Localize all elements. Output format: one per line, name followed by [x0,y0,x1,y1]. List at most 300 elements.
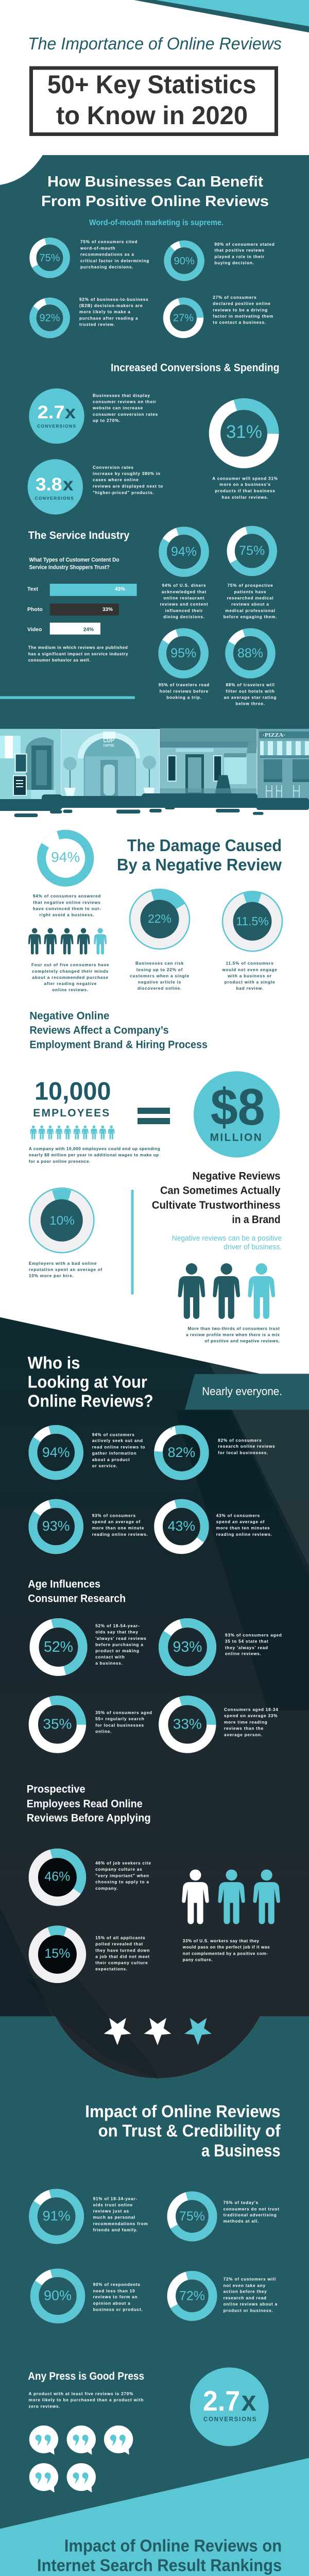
text: five reviews: more likely to be purchased than a product with [29,2398,144,2402]
stat: 92 percent: more likely to make a [79,310,131,314]
heading: the service industry: The Service Industry [28,530,130,541]
stat: 82 percent local: 82% of consumers [218,1438,262,1443]
bar chart: customer content trust: 24% [83,627,94,633]
stat: 22 percent [129,889,190,991]
heading: any press: Any Press is Good Press [28,2370,144,2382]
stat: 11.5 percent: 11.5% [236,914,269,928]
heading: search result rankings: Internet Search Result Rankings [37,2555,282,2574]
icon: three stars [104,2018,212,2045]
shop: cup coffee: CUP [103,737,114,744]
text: 380 percent: Conversion rates [93,465,134,470]
panel: impact on search rankings [0,2458,309,2576]
stat: 11.5 percent: product with a single [225,980,275,985]
stat: 94 percent avoid [33,828,101,917]
heading: trustworthiness: Can Sometimes Actually [160,1184,281,1197]
stat: 10,000 employees: A company with 10,000 employees could end up spending [29,1147,160,1151]
stat: 11.5 percent: bad review. [236,986,264,991]
stat: 10 percent: reputation spent an average of [29,1267,102,1272]
icon: equals sign [138,1108,170,1124]
stat: 52 percent: product or making [95,1649,140,1653]
panel: who is looking at your online reviews [0,1317,309,2078]
stat: 75 percent advertising: methods at all. [224,2219,259,2224]
heading: who is looking [28,1353,153,1411]
stat: 94 percent diners: influenced their [165,608,203,613]
stat: 46 percent culture: company. [95,1886,118,1891]
banner: nearly everyone [185,1374,309,1410]
stat: 91 percent: friends and family. [93,2228,138,2232]
stat: 94 percent customers: or service. [92,1464,117,1468]
stat: 11.5 percent: would not even engage [221,968,278,972]
text: 270 percent: up to 270%. [93,418,121,423]
stat: 88 percent travelers: filter out hotels with [226,689,275,693]
stat: 10 percent: 10% [49,1214,75,1228]
heading: trustworthiness [152,1170,281,1226]
street and dashes [0,793,309,817]
badge: 3.8x conversions: 3.8 [36,474,62,495]
stat: 90 percent: that positive reviews [214,248,265,253]
stat: 33 percent: Consumers aged 18-34 [224,1707,279,1712]
illustration: storefront street [0,728,309,817]
stat: 92 percent: purchase after reading a [79,316,138,320]
stat: 43 percent ten minutes: spend an average of [216,1519,265,1524]
badge: 8 million dollars: $8 [211,1078,265,1136]
stat: 93 percent one minute: 93% [42,1518,70,1534]
stat: 72 percent customers: online reviews about a [224,2302,278,2307]
stat: 82 percent local: for local businesses. [218,1451,268,1455]
bar chart: customer content trust: Photo [27,606,43,613]
stat: 33 percent: 33% [173,1716,202,1732]
stat: 94 percent customers: read online reviews to [92,1445,145,1450]
heading: employment brand: Employment Brand & Hiring Process [29,1039,208,1051]
stat: 82 percent local [153,1425,276,1481]
badge: 3.8x conversions: CONVERSIONS [35,496,74,501]
stat: 94 percent avoid: right avoid a business. [39,912,95,917]
stat: 90 percent respondents: opinion about a [93,2301,131,2306]
heading: who is looking: Who is [28,1353,80,1372]
stat: 88 percent travelers: below three. [235,702,265,706]
stat: 94 percent diners: 94% of U.S. diners [162,583,206,588]
stat: 27 percent: reviews to be a driving [213,308,268,312]
heading: age influences: Consumer Research [28,1592,126,1604]
stat: 72 percent customers [167,2270,278,2321]
stat: 91 percent: 91% [43,2208,71,2224]
stat: 91 percent: recommendations from [93,2222,148,2226]
stat: 10,000 employees: 10,000 [35,1077,111,1105]
stat: 75 percent: recommendations as a [80,252,134,257]
text: five reviews: A product with at least five reviews is 270% [29,2392,133,2396]
stat: 94 percent customers: gather information [92,1451,136,1456]
stat: 46 percent culture: choosing to apply to a [95,1880,149,1885]
header corner ribbon [134,0,309,32]
stat: 43 percent ten minutes [153,1498,272,1555]
stat: 75 percent advertising: traditional advertising [224,2213,277,2217]
badge: 3.8x conversions [28,459,83,515]
icon: three people [178,1263,275,1319]
shop: awning and door [0,729,61,800]
stat: 92 percent: 92% of business-to-business [79,297,148,302]
stat: 92 percent [29,297,148,338]
stat: 52 percent: olds say that they [95,1630,139,1635]
stat: 90 percent respondents: business or product. [93,2308,143,2312]
text: medium matters: consumer behavior as well. [28,658,91,663]
stat: 94 percent customers: actively seek out and [92,1438,143,1443]
stat: 52 percent: contact with [95,1655,125,1659]
heading: age influences [28,1578,126,1604]
stat: 35 percent: 35% of consumers aged [95,1710,152,1715]
stat: 95 percent travelers: 95% of travelers read [159,683,210,687]
stat: 95 percent travelers [157,626,210,700]
stat: 95 percent travelers: booking a trip. [166,696,202,700]
heading: how businesses can benefit: How Businesses Can Benefit [47,174,263,190]
stat: 92 percent: trusted review. [79,322,115,327]
heading: search result rankings [37,2536,282,2574]
badge: 2.7x conversions: x [65,402,76,422]
icon: three workers [182,1870,280,1924]
stat: 88 percent travelers: an average star rating [224,696,277,700]
stat: 46 percent culture: 46% [44,1869,70,1884]
bar chart: customer content trust: Text [27,586,38,592]
stat: 94 percent avoid: that negative online reviews [33,900,101,905]
shop: dark door [160,728,257,795]
stat: 27 percent: to contact a business. [213,320,266,325]
stat: 27 percent: 27% of consumers [213,295,256,300]
stat: 43 percent ten minutes: 43% of consumers [216,1514,260,1518]
stat: 94 percent customers: about a product [92,1458,130,1462]
stat: 93 percent one minute [27,1498,148,1555]
main title box: to Know in 2020 [56,101,248,130]
bar chart: customer content trust [27,557,137,635]
heading: damage: By a Negative Review [117,855,282,874]
stat: 31 percent: A consumer will spend 31% [212,476,278,481]
stat: 43 percent ten minutes: reading online reviews. [216,1532,272,1537]
stat: 94 percent avoid: have convinced them to out- [33,907,101,911]
stat: 15 percent turned down: 15% [44,1946,70,1961]
heading: impact on trust [85,2102,281,2160]
stat: 75 percent advertising: consumers do not trust [224,2207,280,2211]
heading: damage: The Damage Caused [127,836,282,855]
heading: prospective employees [27,1783,151,1824]
heading: increased conversions: Increased Conversions & Spending [111,362,279,374]
stat: 10,000 employees [29,1077,160,1164]
title: The Importance of Online Reviews [28,34,282,53]
badge: 2.7x conversions large: CONVERSIONS [203,2417,256,2423]
stat: 75 percent: word-of-mouth [80,246,115,250]
stat: 46 percent culture: 46% of job seekers cite [95,1861,151,1866]
stat: 75 percent patients: researched medical [227,596,273,601]
subheading: positive driver: driver of business. [224,1243,282,1251]
stat: 72 percent customers: 72% [179,2289,205,2303]
stat: 92 percent: (B2B) decision-makers are [79,303,143,308]
heading: impact on trust: on Trust & Credibility of [98,2121,281,2140]
stat: 75 percent patients: patients have [234,589,266,595]
stat: 10,000 employees: EMPLOYEES [33,1107,109,1119]
stat: 90 percent: 90% of consumers stated [214,242,275,247]
stat: 75 percent advertising [167,2191,280,2242]
stat: 94 percent avoid: 94% of consumers answered [33,894,101,899]
stat: 75 percent: 75% [39,252,60,264]
text: 33 percent workers: 33% of U.S. workers say that they [183,1939,260,1943]
stat: 90 percent respondents: reviews to form an [93,2295,138,2299]
badge: 2.7x conversions large: x [242,2385,256,2417]
stat: 11.5 percent [221,891,283,991]
stat: 27 percent: declared positive online [213,301,271,306]
heading: age influences: Age Influences [28,1578,100,1590]
stat: 75 percent [29,237,149,278]
shop: cup coffee [61,730,159,796]
stat: 35 percent: 35% [43,1716,72,1732]
stat: 52 percent: 52% [44,1639,73,1655]
stat: 15 percent turned down: polled revealed that [95,1942,143,1946]
stat: 92 percent: 92% [39,312,60,324]
stat: 33 percent: more time reading [224,1720,268,1724]
stat: 93 percent aged 35 to 54: 93% of consumers aged [225,1633,282,1637]
stat: 72 percent customers: not even take any [224,2283,266,2288]
text: 33 percent workers: would pass on the perfect job if it was [182,1945,270,1950]
heading: damage [117,836,282,874]
stat: 15 percent turned down: they have turned down [95,1948,150,1953]
badge: 2.7x conversions [29,388,84,444]
stat: 88 percent travelers [224,626,277,706]
stat: 10 percent [29,1188,102,1278]
badge: 2.7x conversions large: 2.7 [203,2385,240,2417]
stat: 27 percent: 27% [173,312,194,324]
stat: 94 percent diners: reviews and content [160,602,208,607]
stat: 22 percent: discovered online. [138,986,182,991]
heading: prospective employees: Reviews Before Applying [27,1812,151,1824]
text: 380 percent: reviews are displayed next to [93,484,163,489]
stat: 52 percent: 'always' read reviews [95,1636,147,1641]
stat: 90 percent: 90% [174,256,195,267]
heading: who is looking: Looking at Your [28,1372,147,1391]
subheading: positive driver: Negative reviews can be a positive [172,1234,282,1243]
badge: 2.7x conversions: CONVERSIONS [37,423,76,429]
stat: 93 percent aged 35 to 54: online reviews. [225,1652,262,1656]
stat: 15 percent turned down [27,1924,150,1985]
stat: 35 percent [27,1694,152,1754]
stat: 75 percent advertising: 75% [179,2209,205,2224]
heading: employment brand: Negative Online [29,1009,109,1022]
stat: 90 percent [164,240,275,281]
stat: 75 percent patients: medical professional [225,608,276,613]
heading: trustworthiness: in a Brand [232,1213,281,1226]
stat: 31 percent: has stellar reviews. [221,495,269,500]
text: 270 percent: consumer conversion rates [93,412,158,417]
heading: prospective employees: Prospective [27,1783,85,1795]
stat: 22 percent: 22% [148,912,171,925]
stat: 94 percent diners: acknowledged that [162,589,207,595]
stat: 94 percent diners: dining decisions. [163,615,205,619]
stat: 90 percent respondents [29,2267,143,2325]
bar chart: customer content trust: 33% [102,607,113,613]
heading: trustworthiness: Cultivate Trustworthiness [152,1199,281,1211]
stat: 95 percent travelers: 95% [170,646,196,660]
stat: 94 percent customers [27,1424,145,1481]
text: medium matters: The medium in which reviews are published [28,646,128,650]
stat: 91 percent [28,2188,148,2245]
stat: 94 percent diners: 94% [171,545,197,559]
stat: 46 percent culture: company culture as [95,1867,143,1872]
shop: cup coffee: COFFEE [103,744,114,748]
stat: 52 percent [29,1617,147,1677]
stat: 15 percent turned down: a job that did not meet [95,1955,150,1959]
text: four out of five: about a recommended purchase [32,975,109,980]
text: 270 percent: website can increase [92,406,143,411]
stat: 35 percent: online. [95,1729,112,1734]
stat: 75 percent advertising: 75% of today's [224,2200,259,2205]
text: four out of five: completely changed their minds [32,969,109,974]
stat: 35 percent: for local businesses [95,1723,144,1727]
stat: 94 percent customers: 94% of customers [92,1432,135,1437]
stat: 33 percent: average person. [224,1733,263,1737]
text: two-thirds trust: of positive and negative reviews. [204,1339,280,1344]
stat: 95 percent travelers: hotel reviews before [160,689,209,693]
stat: 72 percent customers: 72% of customers will [224,2277,276,2282]
stat: 33 percent: spend on average 33% [224,1714,278,1718]
stat: 10,000 employees: for a poor online presence. [29,1159,91,1164]
main title box: 50+ Key Statistics [47,70,256,99]
heading: how businesses can benefit [41,174,269,210]
stat: 93 percent aged 35 to 54: 35 to 54 state that [225,1639,268,1644]
heading: prospective employees: Employees Read Online [27,1798,143,1810]
stat: 93 percent aged 35 to 54: 93% [173,1639,202,1655]
shop: pizza [257,729,309,799]
main title box [31,68,276,134]
stat: 22 percent: Businesses can risk [135,961,184,966]
text: two-thirds trust: More than two-thirds of consumers trust [188,1327,280,1331]
stat: 75 percent patients [224,525,278,619]
heading: impact on trust: Impact of Online Reviews [85,2102,281,2121]
stat: 31 percent: 31% [226,422,262,442]
stat: 94 percent customers: 94% [42,1445,70,1460]
stat: 10 percent: Employers with a bad online [29,1261,97,1266]
stat: 91 percent: olds trust online [93,2203,133,2207]
stat: 27 percent [163,295,273,338]
stat: 91 percent: 91% of 18-34-year- [93,2196,138,2201]
stat: 93 percent one minute: more than one minute [92,1526,144,1531]
stat: 94 percent diners [157,525,211,619]
stat: 75 percent patients: before engaging them. [224,615,277,619]
stat: 31 percent [208,397,280,500]
text: 270 percent: Businesses that display [93,394,150,398]
stat: 10,000 employees: nearly $8 million per year in additional wages to make up [29,1153,159,1157]
heading: employment brand [29,1009,208,1051]
stat: 75 percent patients: 75% [239,544,265,558]
stat: 93 percent one minute: 93% of consumers [92,1514,136,1518]
stat: 27 percent: factor in motivating them [213,314,273,318]
stat: 91 percent: reviews just as [93,2209,129,2213]
stat: 31 percent: more on a business's [219,482,271,487]
stat: 82 percent local: 82% [168,1445,195,1460]
text: 33 percent workers: not complemented by a positive com- [183,1951,268,1956]
stat: 10 percent: 10% more per hire. [29,1274,74,1278]
stat: 93 percent aged 35 to 54 [158,1617,282,1677]
bar chart: customer content trust: 43% [115,587,125,592]
icon: row of ten people [30,1125,115,1140]
stat: 52 percent: a business. [95,1661,123,1666]
shop: pizza: ·PIZZA· [263,732,285,738]
heading: employment brand: Reviews Affect a Company’s [29,1024,169,1037]
stat: 11.5 percent: 11.5% of consumers [226,961,274,966]
subheading: positive driver [172,1234,282,1251]
icon: four of five people [28,928,107,955]
stat: 22 percent: negative article is [138,980,181,985]
heading: trustworthiness: Negative Reviews [193,1170,281,1182]
text: 380 percent: increase by roughly 380% in [93,471,161,476]
text: 270 percent: consumer reviews on their [93,400,157,404]
panel: damage of a negative review [28,828,283,1344]
stat: 75 percent: purchasing decisions. [80,265,133,269]
stat: 91 percent: much as personal [93,2215,135,2220]
stat: 15 percent turned down: 15% of all applicants [95,1936,146,1940]
text: 33 percent workers: pany culture. [183,1958,213,1962]
bar chart: customer content trust: Service Industry Shoppers Trust? [29,565,110,571]
stat: 43 percent ten minutes: 43% [168,1518,195,1534]
text: 380 percent: "higher-priced" products. [93,490,154,495]
stat: 11.5 percent: with a business or [227,974,272,978]
stat: 75 percent: critical factor in determining [80,259,149,263]
text: four out of five: after reading negative [44,981,97,986]
stat: 93 percent one minute: spend an average of [92,1519,141,1524]
badge: 2.7x conversions: 2.7 [38,402,64,422]
stat: 93 percent one minute: reading online reviews. [92,1532,148,1537]
icon: five review bubbles [29,2426,133,2493]
text: two-thirds trust: a review profile more when there is a mix [186,1332,280,1337]
stat: 90 percent respondents: 90% [44,2287,72,2303]
stat: 33 percent [158,1694,279,1754]
badge: 8 million dollars [194,1071,280,1158]
stat: 90 percent respondents: 90% of respondents [93,2282,141,2287]
stat: 46 percent culture: "very important" when [95,1873,149,1878]
stat: 90 percent: played a role in their [214,255,265,259]
banner: nearly everyone: Nearly everyone. [202,1385,282,1398]
stat: 93 percent aged 35 to 54: they 'always' read [225,1646,268,1650]
stat: 88 percent travelers: 88% of travelers will [226,683,275,687]
panel: impact on trust and credibility [0,2016,309,2529]
stat: 46 percent culture [28,1848,151,1907]
stat: 75 percent patients: 75% of prospective [227,583,273,588]
stat: 22 percent: losing up to 22% of [136,968,183,972]
bar chart: customer content trust: Video [27,626,42,633]
text: four out of five: Four out of five consumers have [31,963,109,968]
heading: how businesses can benefit: From Positive Online Reviews [41,193,269,210]
stat: 31 percent: products if that business [215,488,276,494]
badge: 2.7x conversions large [190,2367,269,2446]
stat: 15 percent turned down: their company culture [95,1961,148,1965]
stat: 52 percent: before purchasing a [95,1642,144,1647]
stat: 75 percent patients: reviews about a [231,602,269,607]
stat: 75 percent: 75% of consumers cited [80,240,138,244]
text: five reviews: zero reviews. [29,2404,60,2409]
stat: 94 percent avoid: 94% [51,849,80,865]
stat: 22 percent: customers when a single [130,974,190,978]
subheading: Word-of-mouth marketing is supreme. [89,218,224,227]
heading: who is looking: Online Reviews? [28,1392,153,1411]
stat: 94 percent diners: online restaurant [163,596,204,601]
panel: benefits of positive reviews [0,155,309,729]
heading: search result rankings: Impact of Online Reviews on [64,2536,282,2555]
text: four out of five: online reviews. [52,988,89,992]
heading: impact on trust: a Business [201,2141,281,2160]
stat: 35 percent: 55+ regularly search [95,1717,145,1721]
stat: 72 percent customers: action before they [224,2290,267,2294]
stat: 72 percent customers: research and read [224,2296,267,2300]
text: medium matters: has a significant impact on service industry [28,652,128,656]
badge: 8 million dollars: MILLION [210,1132,262,1144]
stat: 33 percent: reviews than the [224,1726,264,1731]
stat: 15 percent turned down: expectations. [95,1967,128,1971]
stat: 72 percent customers: product or business. [224,2308,273,2313]
stat: 43 percent ten minutes: more than ten minutes [216,1526,270,1531]
